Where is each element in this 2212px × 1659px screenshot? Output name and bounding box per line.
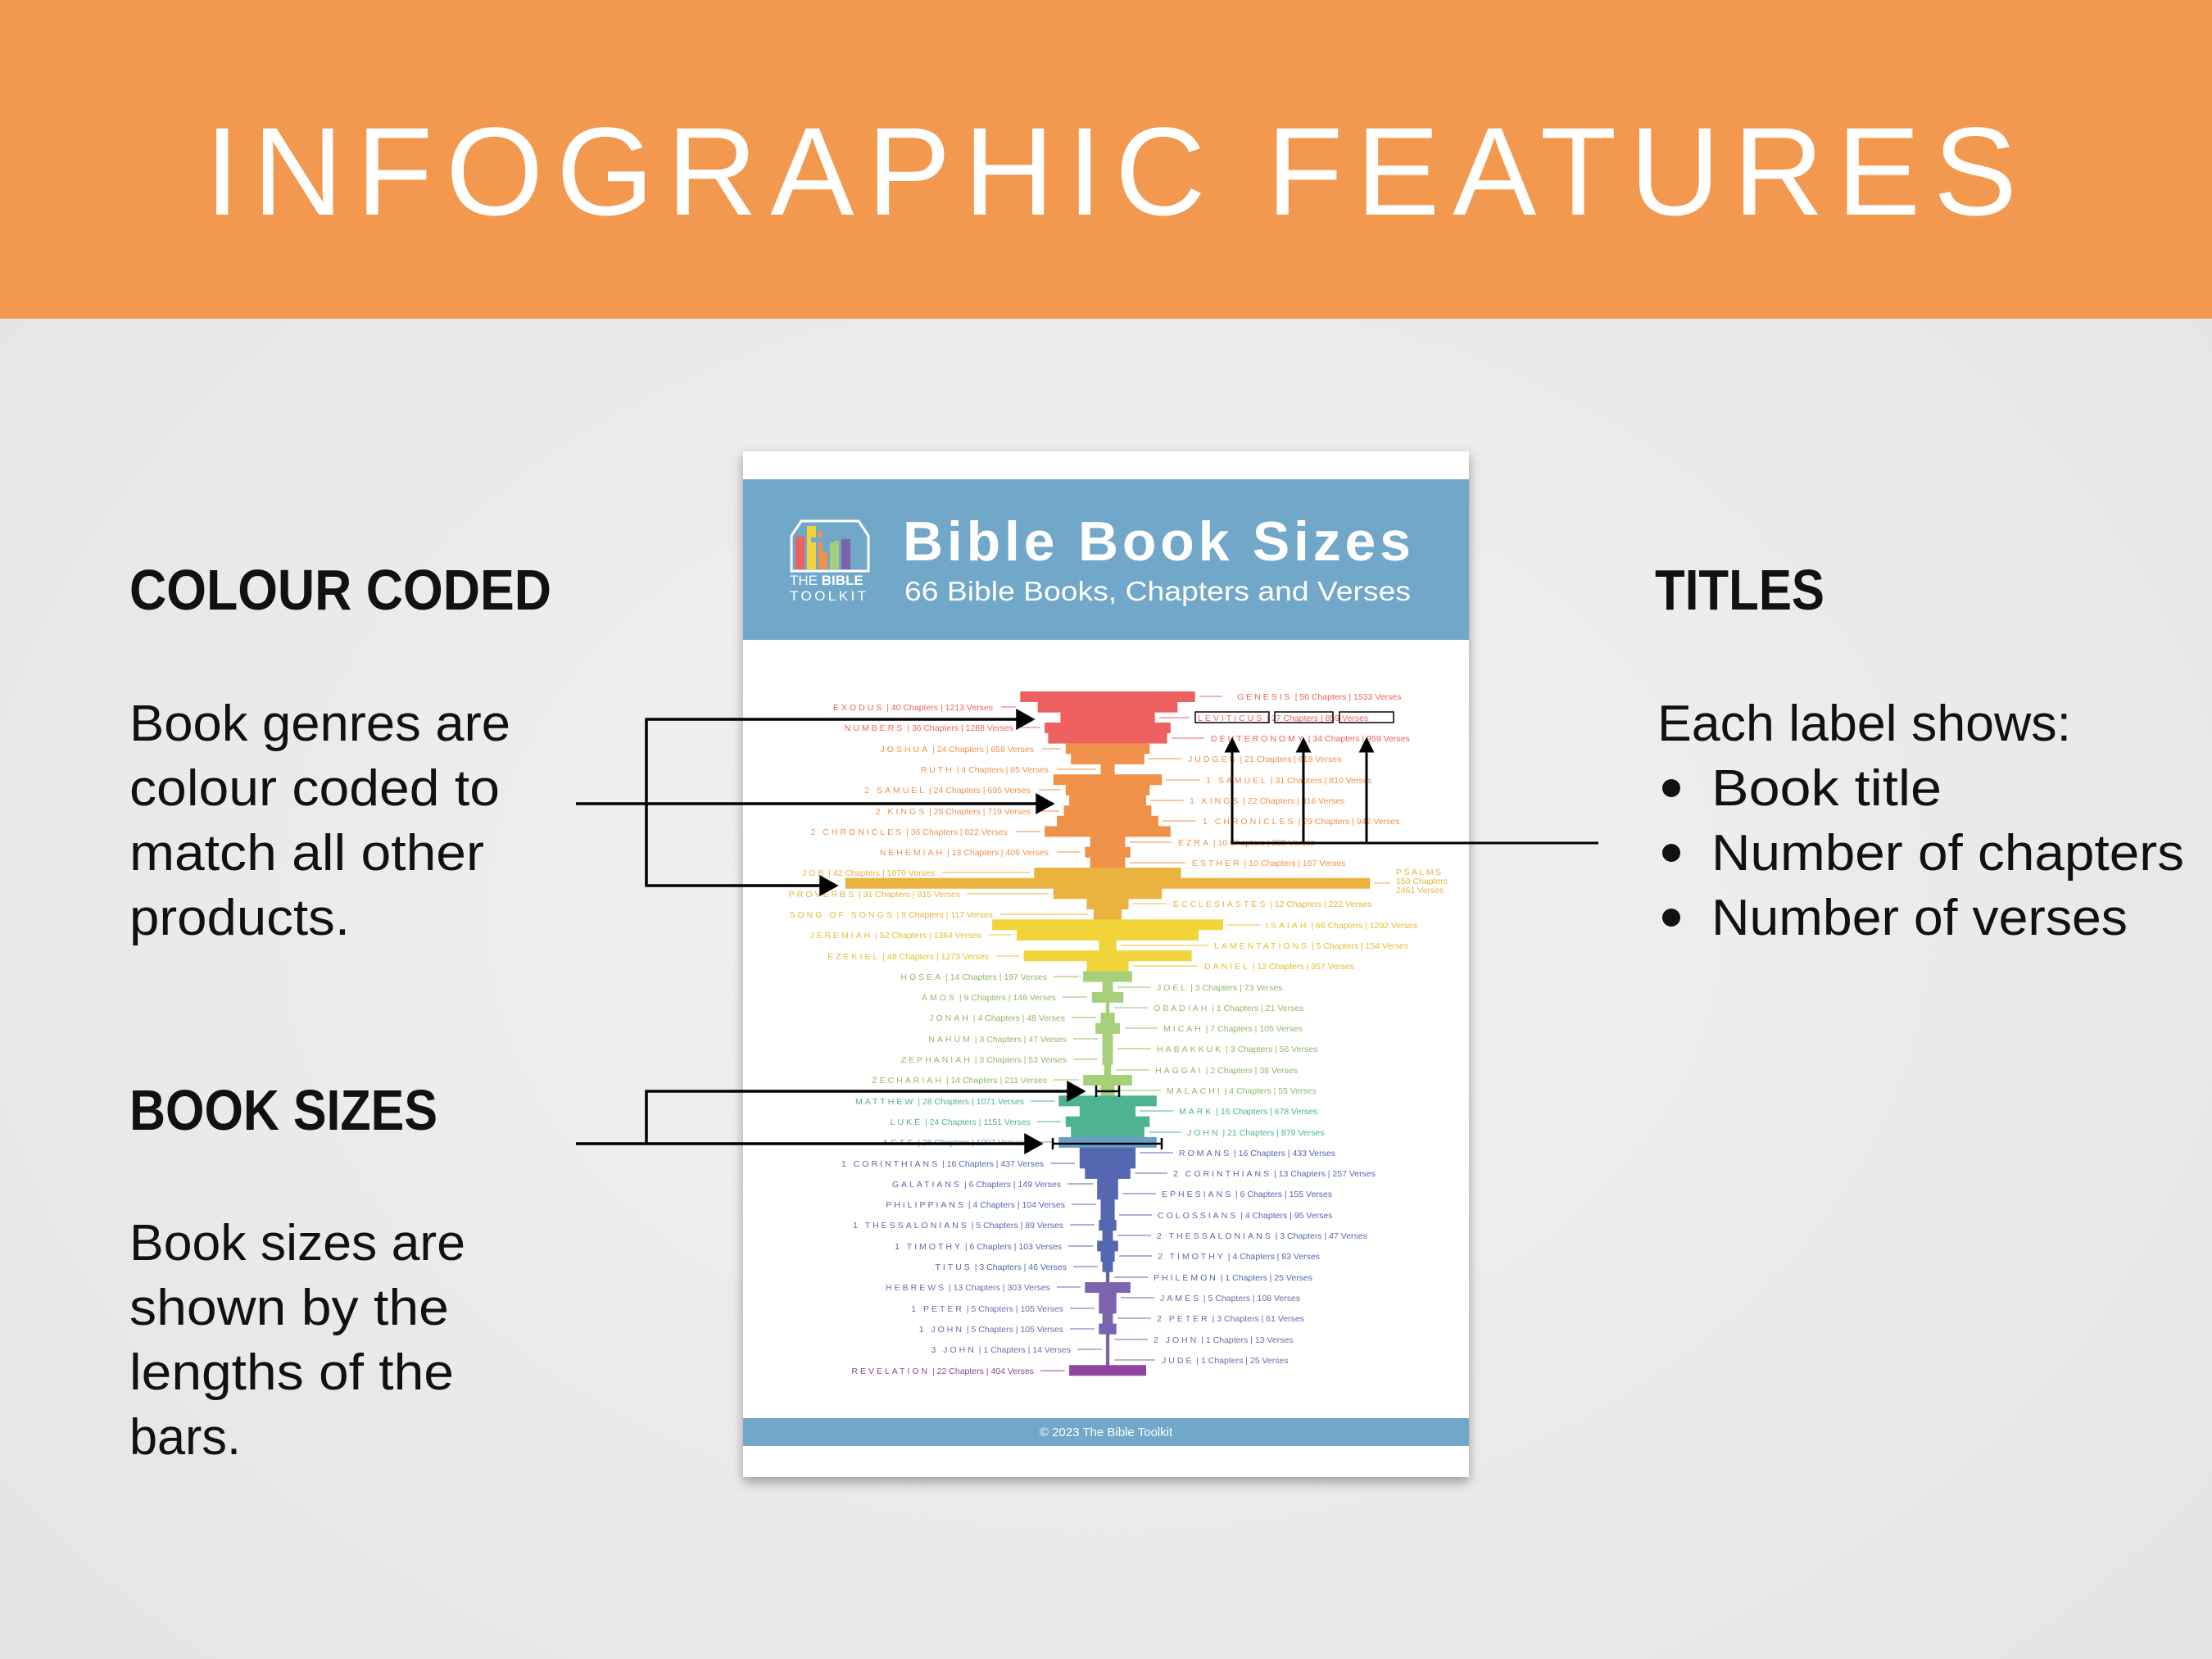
text block: label contents list: Each label shows: [1657, 696, 2071, 752]
banner [0, 0, 2212, 319]
bar chart: bible books: ISAIAH | 66 Chapters | 1292 Verses [1266, 921, 1417, 931]
heading: colour coded: COLOUR CODED [129, 558, 551, 622]
bar chart: bible books: 2 KINGS | 25 Chapters | 719 Verses [876, 807, 1031, 817]
bar chart: bible books: PHILEMON | 1 Chapters | 25 Verses [1154, 1273, 1312, 1283]
heading: book sizes: BOOK SIZES [129, 1078, 437, 1142]
bar chart: bible books: ZEPHANIAH | 3 Chapters | 53 Verses [901, 1055, 1067, 1065]
bar chart: bible books: LAMENTATIONS | 5 Chapters | 154 Verses [1214, 941, 1408, 951]
bar chart: bible books: JOHN | 21 Chapters | 879 Verses [1187, 1128, 1324, 1138]
bar chart: bible books: EZRA | 10 Chapters | 280 Verses [1178, 838, 1315, 848]
text block: book sizes description: lengths of the [129, 1344, 454, 1401]
bar chart: bible books: 2 SAMUEL | 24 Chapters | 695 Verses [864, 786, 1031, 796]
bar chart: bible books: JONAH | 4 Chapters | 48 Verses [929, 1013, 1065, 1023]
arrows: book sizes [576, 1083, 1162, 1152]
text block: colour coded description: colour coded to [129, 760, 500, 817]
bar chart: bible books: LEVITICUS | 27 Chapters | 859 Verses [1198, 714, 1368, 723]
bar chart: bible books: ESTHER | 10 Chapters | 167 Verses [1192, 859, 1345, 868]
bar chart: bible books: DEUTERONOMY | 34 Chapters | 959 Verses [1211, 734, 1410, 744]
bar chart: bible books: GALATIANS | 6 Chapters | 149 Verses [892, 1180, 1061, 1190]
icon: bible toolkit logo: THE BIBLE [790, 573, 863, 588]
bar chart: bible books: 1 CHRONICLES | 29 Chapters | 942 Verses [1203, 817, 1399, 827]
bar chart: bible books: 1 KINGS | 22 Chapters | 816 Verses [1190, 796, 1344, 806]
bar chart: bible books: ZECHARIAH | 14 Chapters | 211 Verses [872, 1076, 1047, 1086]
poster title: Bible Book Sizes [903, 510, 1411, 573]
heading: titles: TITLES [1655, 558, 1824, 622]
bar chart: bible books: EPHESIANS | 6 Chapters | 155 Verses [1162, 1190, 1332, 1199]
text block: book sizes description: Book sizes are [129, 1215, 465, 1271]
bar chart: bible books: 2461 Verses [1396, 886, 1444, 895]
bar chart: bible books: HEBREWS | 13 Chapters | 303 Verses [886, 1283, 1050, 1293]
bar chart: bible books: HABAKKUK | 3 Chapters | 56 Verses [1157, 1045, 1317, 1054]
bar chart: bible books: 3 JOHN | 1 Chapters | 14 Verses [931, 1345, 1071, 1355]
bar chart: bible books: JUDE | 1 Chapters | 25 Verses [1162, 1356, 1289, 1366]
poster footer [743, 1418, 1469, 1446]
poster [743, 451, 1469, 1477]
bar chart: bible books: JEREMIAH | 52 Chapters | 1364 Verses [809, 931, 981, 941]
bar chart: bible books: 2 THESSALONIANS | 3 Chapters | 47 Verses [1157, 1231, 1367, 1241]
bar chart: bible books: NEHEMIAH | 13 Chapters | 406 Verses [880, 848, 1049, 858]
text block: book sizes description: bars. [129, 1409, 241, 1466]
poster footer: © 2023 The Bible Toolkit [1040, 1426, 1173, 1439]
bar chart: bible books: JOB | 42 Chapters | 1070 Verses [802, 868, 935, 878]
bar chart: bible books: JOEL | 3 Chapters | 73 Verses [1157, 983, 1282, 993]
bar chart: bible books: NUMBERS | 36 Chapters | 1288 Verses [845, 723, 1013, 733]
bar chart: bible books: REVELATION | 22 Chapters | 404 Verses [851, 1367, 1034, 1376]
bar chart: bible books: 2 CORINTHIANS | 13 Chapters | 257 Verses [1173, 1169, 1376, 1179]
bar chart: bible books: ECCLESIASTES | 12 Chapters | 222 Verses [1173, 900, 1371, 909]
text block: colour coded description: products. [129, 890, 350, 946]
bar chart: bible books: 2 PETER | 3 Chapters | 61 Verses [1157, 1314, 1304, 1324]
icon: bible toolkit logo [790, 521, 868, 604]
text block: label contents list [1657, 696, 2184, 946]
bar chart: bible books: JUDGES | 21 Chapters | 618 Verses [1188, 755, 1341, 764]
bar chart: bible books: SONG OF SONGS | 8 Chapters | 117 Verses [789, 910, 993, 920]
bar chart: bible books: LUKE | 24 Chapters | 1151 Verses [891, 1117, 1031, 1127]
bar chart: bible books: PROVERBS | 31 Chapters | 915 Verses [789, 890, 960, 900]
text block: label contents list: Book title [1711, 760, 1942, 817]
bar chart: bible books: 1 THESSALONIANS | 5 Chapters | 89 Verses [853, 1221, 1063, 1231]
bar chart: bible books: 1 JOHN | 5 Chapters | 105 Verses [919, 1325, 1063, 1335]
arrows: titles [1195, 712, 1598, 843]
bar chart: bible books: EZEKIEL | 48 Chapters | 1273 Verses [827, 952, 989, 962]
bar chart: bible books: RUTH | 4 Chapters | 85 Verses [921, 765, 1049, 775]
bar chart: bible books: 2 JOHN | 1 Chapters | 13 Verses [1154, 1335, 1294, 1345]
bar chart: bible books: HOSEA | 14 Chapters | 197 Verses [900, 972, 1047, 982]
bar chart: bible books: 1 CORINTHIANS | 16 Chapters | 437 Verses [841, 1159, 1044, 1169]
arrows: colour coded [576, 711, 1052, 894]
poster subtitle: 66 Bible Books, Chapters and Verses [904, 576, 1411, 606]
text block: colour coded description: match all other [129, 825, 484, 882]
bar chart: bible books: HAGGAI | 2 Chapters | 38 Verses [1155, 1066, 1298, 1076]
bar chart: bible books: JAMES | 5 Chapters | 108 Verses [1160, 1294, 1300, 1303]
text block: colour coded description: Book genres are [129, 696, 510, 752]
bar chart: bible books [789, 691, 1448, 1376]
bar chart: bible books: ROMANS | 16 Chapters | 433 Verses [1179, 1149, 1335, 1158]
bar chart: bible books: ACTS | 28 Chapters | 1007 Verses [882, 1138, 1024, 1148]
bar chart: bible books: MICAH | 7 Chapters | 105 Verses [1163, 1024, 1303, 1034]
bar chart: bible books: GENESIS | 50 Chapters | 1533 Verses [1237, 692, 1401, 702]
bar chart: bible books: TITUS | 3 Chapters | 46 Verses [935, 1262, 1067, 1272]
poster header [743, 479, 1469, 640]
text block: label contents list: Number of verses [1711, 890, 2128, 946]
bar chart: bible books: 1 PETER | 5 Chapters | 105 Verses [911, 1304, 1063, 1314]
bar chart: bible books: MATTHEW | 28 Chapters | 1071 Verses [855, 1097, 1024, 1107]
bar chart: bible books: PSALMS [1396, 868, 1444, 877]
bar chart: bible books: MALACHI | 4 Chapters | 55 Verses [1167, 1086, 1317, 1096]
bar chart: bible books: PHILIPPIANS | 4 Chapters | 104 Verses [886, 1200, 1065, 1210]
text block: colour coded description [129, 696, 510, 946]
text block: book sizes description: shown by the [129, 1280, 449, 1336]
bar chart: bible books: AMOS | 9 Chapters | 146 Verses [922, 993, 1056, 1003]
text block: label contents list: Number of chapters [1711, 825, 2184, 882]
title: INFOGRAPHIC FEATURES [205, 102, 2017, 242]
bar chart: bible books: 1 TIMOTHY | 6 Chapters | 103 Verses [895, 1242, 1062, 1252]
bar chart: bible books: 1 SAMUEL | 31 Chapters | 810 Verses [1206, 776, 1372, 786]
bar chart: bible books: EXODUS | 40 Chapters | 1213 Verses [833, 703, 993, 713]
text block: book sizes description [129, 1215, 465, 1466]
bar chart: bible books: 2 CHRONICLES | 36 Chapters | 822 Verses [811, 827, 1008, 837]
bar chart: bible books: DANIEL | 12 Chapters | 357 Verses [1204, 962, 1354, 972]
bar chart: bible books: MARK | 16 Chapters | 678 Verses [1179, 1107, 1317, 1117]
icon: bible toolkit logo: TOOLKIT [790, 588, 866, 604]
bar chart: bible books: 2 TIMOTHY | 4 Chapters | 83 Verses [1158, 1252, 1320, 1262]
bar chart: bible books: JOSHUA | 24 Chapters | 658 Verses [881, 745, 1034, 755]
bar chart: bible books: NAHUM | 3 Chapters | 47 Verses [928, 1035, 1067, 1045]
bar chart: bible books: OBADIAH | 1 Chapters | 21 Verses [1154, 1004, 1303, 1013]
bar chart: bible books: 150 Chapters [1396, 877, 1448, 886]
bar chart: bible books: COLOSSIANS | 4 Chapters | 95 Verses [1158, 1211, 1332, 1221]
